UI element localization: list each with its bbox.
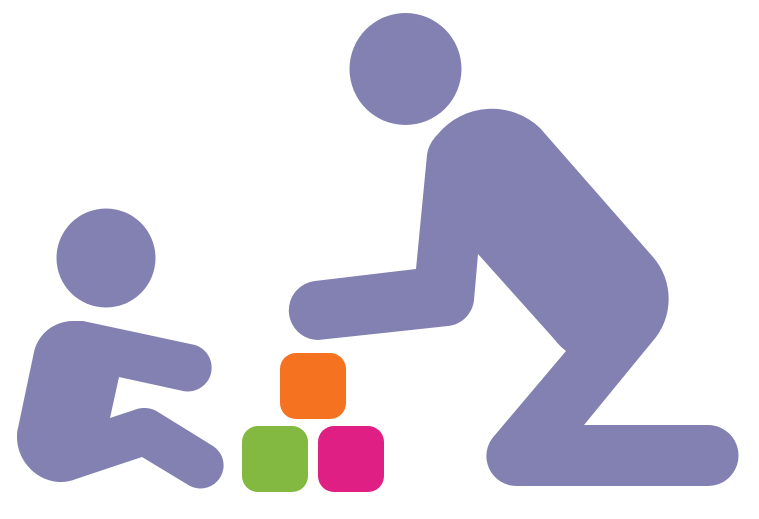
figure: child [17,208,224,489]
orange block [280,353,346,419]
child body [17,321,224,489]
figure: adult [289,13,738,486]
adult body [289,109,738,486]
blocks [242,353,384,492]
pink block [318,426,384,492]
adult head [350,13,462,125]
child head [56,208,156,308]
green block [242,426,308,492]
